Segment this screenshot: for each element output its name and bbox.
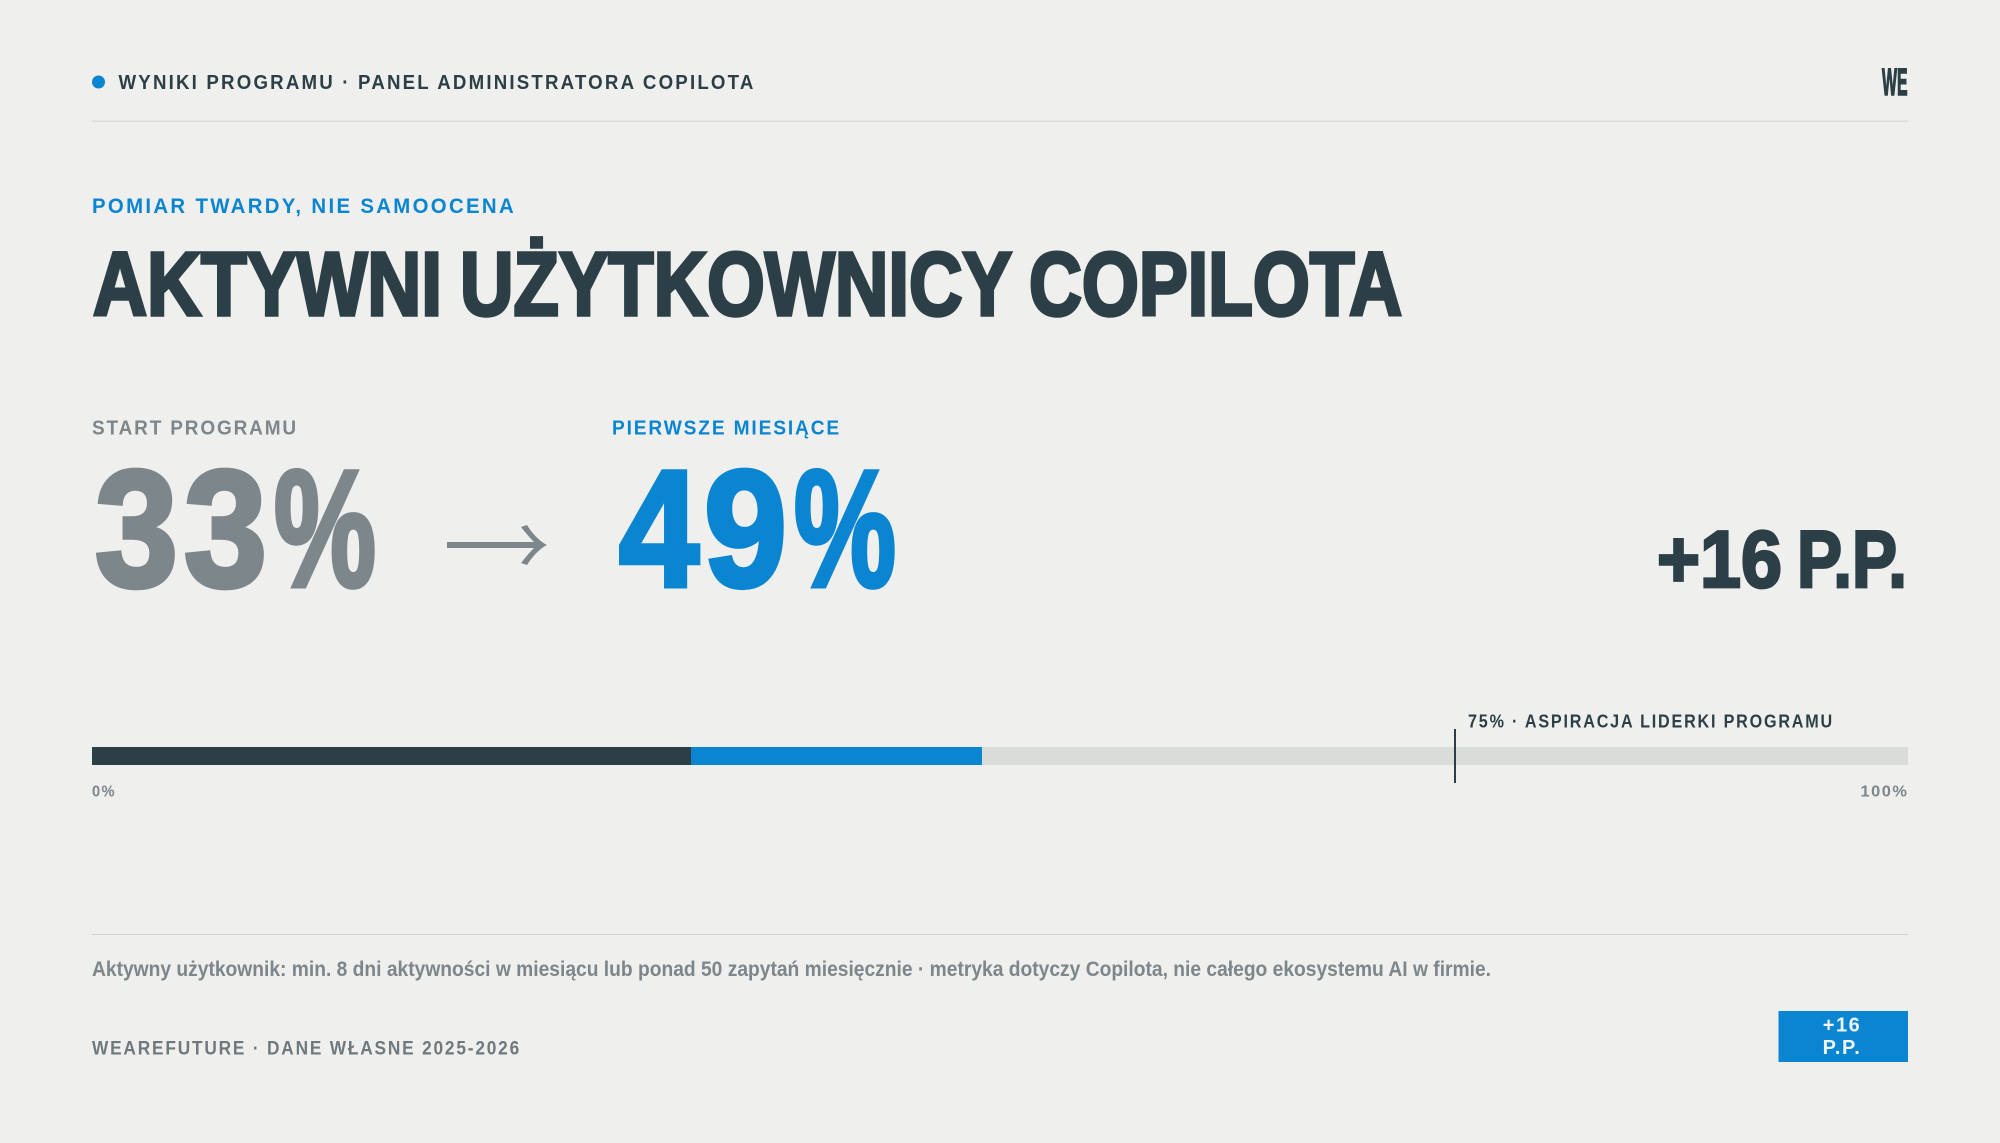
bar track (92, 747, 1908, 765)
footer (92, 934, 1908, 1062)
axis label 100%: 100% (1860, 784, 1908, 800)
stat: start of programme (92, 417, 376, 622)
delta: +16 p.p.: P.P. (1797, 515, 1907, 605)
stat: first months (612, 417, 896, 622)
title: COPILOTA (1029, 235, 1402, 335)
title: UŻYTKOWNICY (460, 235, 1012, 335)
stat label: PIERWSZE MIESIĄCE (612, 417, 841, 440)
title: AKTYWNI (93, 235, 442, 335)
stat value 33% (95, 437, 376, 622)
bar segment: gain to 49% (691, 747, 982, 765)
stat value 49%: 4 (619, 437, 699, 622)
header label: WYNIKI PROGRAMU · PANEL ADMINISTRATORA COPILOTA (118, 71, 756, 94)
stat value 49% (619, 437, 896, 622)
badge: +16 (1823, 1015, 1861, 1037)
stat value 33%: 3 (95, 437, 178, 622)
icon: blue status dot (92, 76, 105, 88)
stat value 33%: 3 (184, 437, 267, 622)
badge: P.P. (1823, 1037, 1861, 1059)
stat value 33%: % (274, 437, 376, 622)
source line: WEAREFUTURE · DANE WŁASNE 2025-2026 (92, 1038, 521, 1060)
definition note: Aktywny użytkownik: min. 8 dni aktywności w miesiącu lub ponad 50 zapytań miesięcznie · metryka dotyczy Copilota, nie całego ekosystemu AI w firmie. (92, 958, 1491, 981)
eyebrow: POMIAR TWARDY, NIE SAMOOCENA (92, 195, 516, 218)
delta: +16 p.p.: +16 (1657, 515, 1782, 605)
infographic slide: WE (1882, 62, 1908, 104)
axis label 0%: 0% (92, 784, 116, 800)
title (93, 235, 1402, 335)
arrow (447, 525, 547, 565)
target label: 75% · ASPIRACJA LIDERKI PROGRAMU (1468, 712, 1834, 732)
progress bar (92, 712, 1908, 800)
badge (1778, 1011, 1908, 1062)
stat value 49%: 9 (704, 437, 787, 622)
stat label: START PROGRAMU (92, 417, 298, 440)
target marker 75% (1454, 729, 1456, 783)
header (92, 62, 1908, 122)
bar segment: start 33% (92, 747, 691, 765)
stat value 49%: % (794, 437, 896, 622)
delta: +16 p.p. (1657, 515, 1907, 605)
